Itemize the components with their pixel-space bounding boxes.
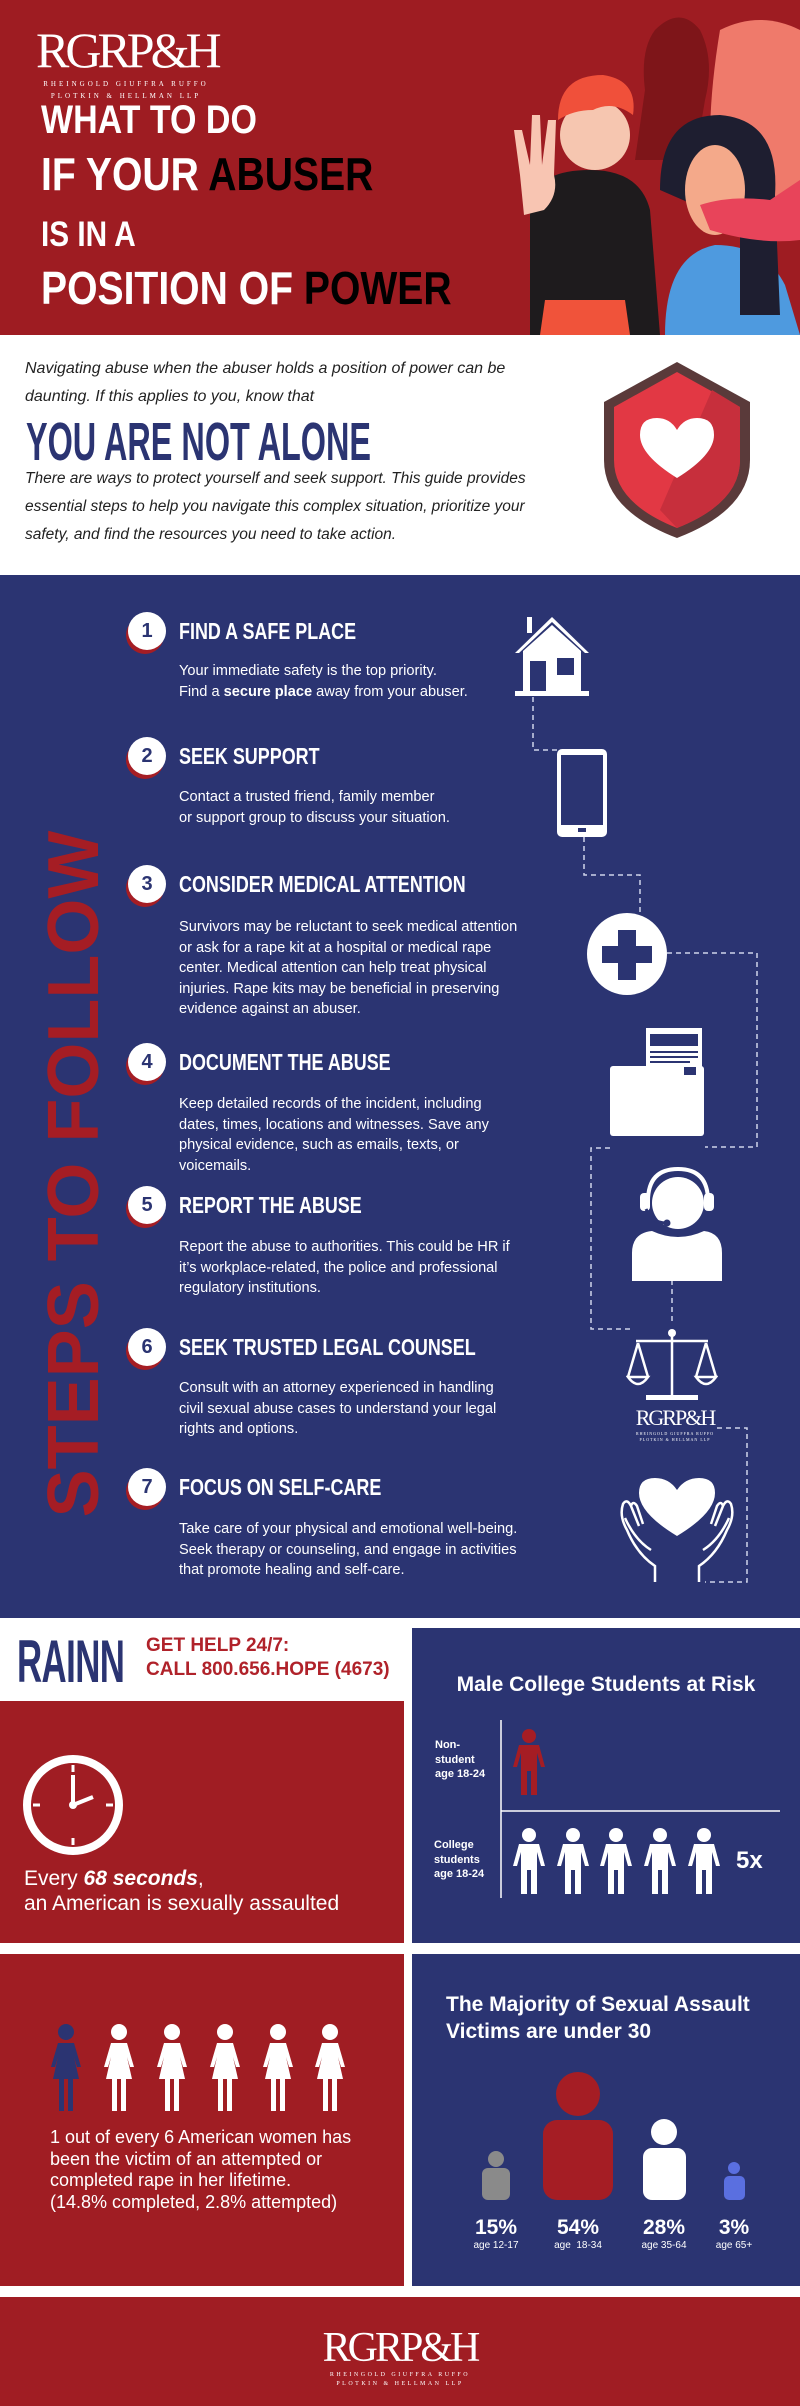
percentages: age 18-34 [554,2240,602,2251]
intro text: Navigating abuse when the abuser holds a position of power can be [25,360,505,377]
title: IF YOUR ABUSER [41,148,373,200]
hotline text: CALL 800.656.HOPE (4673) [146,1659,390,1680]
step 7: Take care of your physical and emotional well-being. [179,1521,517,1537]
step 2: SEEK SUPPORT [179,743,320,769]
intro section [0,335,800,575]
step 1 [126,612,468,700]
logo small [636,1405,716,1442]
intro text [25,360,505,405]
hotline text [146,1635,390,1680]
logo small: RGRP&H [636,1405,714,1430]
percentages: 54% [557,2216,599,2239]
step 4: DOCUMENT THE ABUSE [179,1049,391,1075]
label: college: students [434,1854,480,1866]
stat text: 1 out of every 6 American women has [50,2127,351,2147]
heading: you are not alone: YOU ARE NOT ALONE [26,412,371,472]
step 5 [126,1186,510,1296]
icon: clock [23,1755,123,1855]
icon: scales of justice [626,1329,718,1400]
step 3: center. Medical attention can help treat physical [179,960,486,976]
step 5: REPORT THE ABUSE [179,1192,362,1218]
stat text: Every 68 seconds, [24,1867,204,1890]
footer [0,2297,800,2406]
step 1: Find a secure place away from your abuser. [179,684,468,700]
step 5: it’s workplace-related, the police and professional [179,1260,498,1276]
label: college: College [434,1839,474,1851]
step 1: 1 [141,620,153,642]
step 3: injuries. Rape kits may be beneficial in preserving [179,980,499,996]
icon: phone [557,749,607,837]
percentages: age 35-64 [641,2240,687,2251]
step 4: dates, times, locations and witnesses. Save any [179,1116,489,1132]
stat text: completed rape in her lifetime. [50,2170,291,2190]
vertical heading: steps to follow: STEPS TO FOLLOW [34,831,114,1517]
title [41,98,452,314]
label: non-student: student [435,1754,475,1766]
step 3: or ask for a rape kit at a hospital or medical rape [179,940,491,956]
percentages: age 65+ [716,2240,752,2251]
step 6: SEEK TRUSTED LEGAL COUNSEL [179,1334,476,1360]
step 2: Contact a trusted friend, family member [179,789,434,805]
title: WHAT TO DO [41,98,257,142]
pictogram: six women [51,2024,345,2111]
panel: 1 in 6 women [0,1954,404,2286]
percentages: age 12-17 [473,2240,519,2251]
icon: headset support [632,1167,722,1281]
step 4: physical evidence, such as emails, texts, or [179,1137,459,1153]
step 6: rights and options. [179,1421,298,1437]
intro paragraph [25,470,526,543]
logo: RGRP&H [36,22,218,78]
step 4: Keep detailed records of the incident, including [179,1096,482,1112]
rainn logo text: RAINN [17,1628,124,1695]
step 2: 2 [141,745,153,767]
stat text [24,1867,339,1915]
intro paragraph: There are ways to protect yourself and seek support. This guide provides [25,470,526,487]
illustration: abuse scene [514,18,800,335]
label: non-student [435,1739,486,1780]
step 1: Your immediate safety is the top priority. [179,663,437,679]
stat text: (14.8% completed, 2.8% attempted) [50,2192,337,2212]
intro paragraph: safety, and find the resources you need to take action. [25,526,396,543]
step 6: civil sexual abuse cases to understand your legal [179,1400,496,1416]
icon: shield heart [604,362,750,538]
stat text [50,2127,351,2212]
step 3: CONSIDER MEDICAL ATTENTION [179,871,466,897]
icon: house [515,617,589,696]
stat text: been the victim of an attempted or [50,2148,322,2168]
panel: male college students [412,1628,800,1943]
step 4 [126,1043,489,1174]
logo small: PLOTKIN & HELLMAN LLP [640,1437,710,1442]
step 5: 5 [141,1194,153,1216]
step 7: Seek therapy or counseling, and engage in activities [179,1542,516,1558]
label: non-student: Non- [435,1739,460,1751]
step 3: Survivors may be reluctant to seek medical attention [179,919,517,935]
intro text: daunting. If this applies to you, know that [25,388,314,405]
panel: every 68 seconds [0,1701,404,1943]
icon: medical cross [587,913,667,995]
logo: PLOTKIN & HELLMAN LLP [51,92,201,100]
intro paragraph: essential steps to help you navigate this complex situation, prioritize your [25,498,525,515]
icon: hands holding heart [620,1478,734,1582]
logo: RHEINGOLD GIUFFRA RUFFO [43,80,209,88]
step 2: or support group to discuss your situation. [179,810,450,826]
icon: red man [513,1729,545,1795]
header panel [0,0,800,335]
label: non-student: age 18-24 [435,1768,485,1780]
label: 5x: 5x [736,1847,763,1874]
icon: document folder [610,1028,704,1136]
step 4: voicemails. [179,1158,251,1174]
pictogram: five men [513,1828,720,1894]
step 5: Report the abuse to authorities. This could be HR if [179,1239,510,1255]
label: college [434,1839,484,1880]
footer logo: PLOTKIN & HELLMAN LLP [336,2381,464,2387]
panel title [446,1993,750,2043]
step 7: 7 [141,1476,153,1498]
step 7 [126,1468,517,1578]
step 3 [126,865,517,1017]
footer logo: RHEINGOLD GIUFFRA RUFFO [330,2372,470,2378]
hotline text: GET HELP 24/7: [146,1635,289,1656]
rainn hotline [0,1618,404,1701]
step 6: 6 [141,1336,153,1358]
panel: steps [0,575,800,1618]
step 7: that promote healing and self-care. [179,1562,405,1578]
footer logo: RGRP&H [323,2325,477,2371]
step 3: evidence against an abuser. [179,1001,361,1017]
step 3: 3 [141,873,153,895]
panel title: Male College Students at Risk [457,1673,755,1696]
step 1: FIND A SAFE PLACE [179,618,356,644]
step 7: FOCUS ON SELF-CARE [179,1474,381,1500]
panel title: The Majority of Sexual Assault [446,1993,750,2016]
step 4: 4 [141,1051,153,1073]
panel title: Victims are under 30 [446,2020,651,2043]
percentages: 28% [643,2216,685,2239]
panel: majority under 30 [412,1954,800,2286]
label: college: age 18-24 [434,1868,484,1880]
chart axes [500,1720,780,1898]
percentages: 15% [475,2216,517,2239]
percentages [473,2216,752,2251]
chart: age figures [482,2072,745,2200]
title: POSITION OF POWER [41,262,452,314]
step 6: Consult with an attorney experienced in handling [179,1380,494,1396]
logo small: RHEINGOLD GIUFFRA RUFFO [636,1431,714,1436]
dashed connectors [532,697,758,1583]
step 2 [126,737,450,826]
step 5: regulatory institutions. [179,1280,321,1296]
title: IS IN A [41,215,136,254]
stat text: an American is sexually assaulted [24,1892,339,1915]
percentages: 3% [719,2216,749,2239]
step 6 [126,1328,496,1437]
